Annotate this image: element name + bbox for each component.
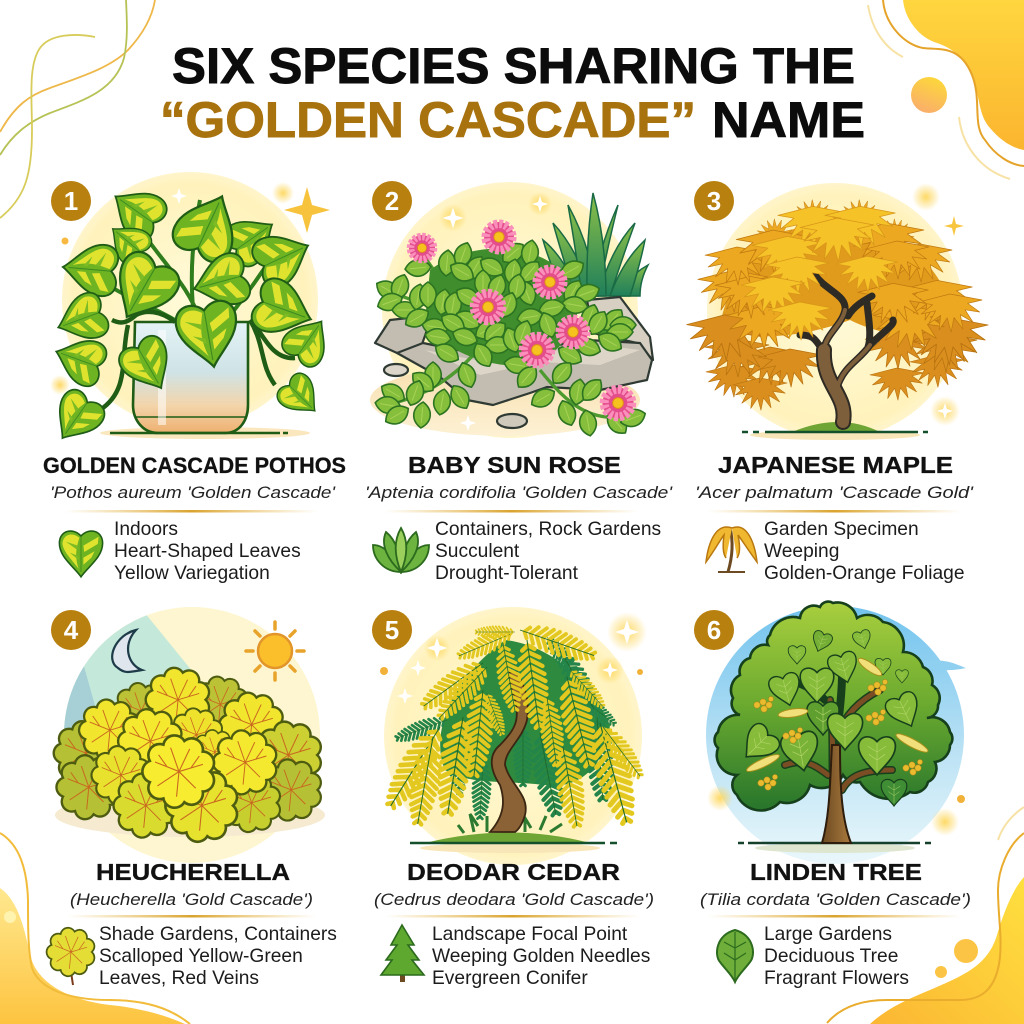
name: JAPANESE MAPLE <box>718 452 953 478</box>
feature list: Shade Gardens, Containers <box>99 924 337 945</box>
scientific name: 'Acer palmatum 'Cascade Gold' <box>695 484 974 502</box>
corner decoration: top left <box>0 0 155 218</box>
name: BABY SUN ROSE <box>408 452 621 478</box>
heuchera leaves <box>54 668 321 842</box>
title: SIX SPECIES SHARING THE <box>172 37 855 94</box>
title <box>160 37 865 148</box>
feature list: Weeping <box>764 541 839 562</box>
pothos leaves <box>44 177 339 451</box>
icon: weeping tree <box>706 527 757 572</box>
illustration: succulent on rocks <box>370 182 653 438</box>
stems <box>378 240 625 417</box>
icon: moon <box>112 630 142 672</box>
icon: succulent <box>373 528 429 572</box>
illustration: pothos in a glass pot <box>44 172 339 451</box>
illustration: weeping deodar cedar <box>379 607 647 865</box>
icon: scalloped leaf <box>47 928 94 985</box>
scientific name: (Heucherella 'Gold Cascade') <box>70 891 313 909</box>
illustration: heucherella mound with sun and moon <box>54 600 325 863</box>
number badge 2 <box>372 181 412 221</box>
name: HEUCHERELLA <box>96 859 290 885</box>
feature list: Deciduous Tree <box>764 946 898 967</box>
title: “GOLDEN CASCADE” <box>160 91 696 148</box>
scientific name: (Tilia cordata 'Golden Cascade') <box>700 891 971 909</box>
name: GOLDEN CASCADE POTHOS <box>43 453 346 478</box>
trunk and branches <box>785 675 892 800</box>
canopy <box>715 602 952 810</box>
number badge 2: 2 <box>385 186 399 216</box>
feature list: Scalloped Yellow-Green <box>99 946 303 967</box>
illustration: linden tree <box>706 602 966 864</box>
scientific name: 'Pothos aureum 'Golden Cascade' <box>50 484 336 502</box>
corner decoration: bottom right <box>827 807 1024 1024</box>
trunk <box>490 672 528 832</box>
dark outer tufts <box>687 315 988 410</box>
panel: linden tree <box>694 602 971 989</box>
feature list: Heart-Shaped Leaves <box>114 541 301 562</box>
icon: evergreen tree <box>381 925 424 982</box>
feature list: Succulent <box>435 541 520 562</box>
feature list: Landscape Focal Point <box>432 924 628 945</box>
rocks <box>375 297 653 428</box>
corner decoration: top right <box>868 0 1024 179</box>
feature list: Golden-Orange Foliage <box>764 563 965 584</box>
illustration: weeping maple tree <box>687 183 988 440</box>
panel: golden cascade pothos <box>43 172 346 584</box>
number badge 3: 3 <box>707 186 721 216</box>
name: DEODAR CEDAR <box>407 859 620 885</box>
scientific name: (Cedrus deodara 'Gold Cascade') <box>374 891 654 909</box>
feature list: Yellow Variegation <box>114 563 270 584</box>
green fronds <box>394 633 619 819</box>
feature list: Leaves, Red Veins <box>99 968 259 989</box>
feature list <box>114 519 301 584</box>
number badge 4: 4 <box>64 615 79 645</box>
feature list: Garden Specimen <box>764 519 919 540</box>
number badge 5 <box>372 610 412 650</box>
icon: heart leaf <box>59 531 103 577</box>
panel: baby sun rose <box>365 181 673 584</box>
bright yellow tufts <box>741 206 897 340</box>
pink flowers <box>409 222 634 419</box>
feature list: Large Gardens <box>764 924 892 945</box>
trunk and branches <box>800 275 893 422</box>
feature list: Indoors <box>114 519 178 540</box>
corner decoration: bottom left <box>0 833 190 1024</box>
yellow fronds <box>379 619 647 828</box>
feature list <box>99 924 337 989</box>
feature list <box>432 924 650 989</box>
panel: heucherella <box>47 600 337 989</box>
number badge 1 <box>51 181 91 221</box>
feature list: Fragrant Flowers <box>764 968 909 989</box>
name: LINDEN TREE <box>750 859 922 885</box>
number badge 4 <box>51 610 91 650</box>
feature list: Evergreen Conifer <box>432 968 588 989</box>
mid orange tufts <box>698 200 982 350</box>
number badge 5: 5 <box>385 615 399 645</box>
feature list: Containers, Rock Gardens <box>435 519 661 540</box>
scientific name: 'Aptenia cordifolia 'Golden Cascade' <box>365 484 673 502</box>
number badge 3 <box>694 181 734 221</box>
icon: sun <box>246 622 304 680</box>
grass blades <box>543 193 648 296</box>
panel: deodar cedar <box>372 607 654 989</box>
number badge 6 <box>694 610 734 650</box>
succulent leaves <box>373 238 648 438</box>
icon: linden leaf <box>717 930 753 982</box>
title: NAME <box>712 91 865 148</box>
heart leaves and blossoms <box>734 629 930 806</box>
panel: japanese maple <box>687 181 988 584</box>
number badge 6: 6 <box>707 615 721 645</box>
number badge 1: 1 <box>64 186 78 216</box>
feature list <box>435 519 661 584</box>
canopy mass <box>720 215 958 336</box>
feature list: Drought-Tolerant <box>435 563 579 584</box>
feature list: Weeping Golden Needles <box>432 946 650 967</box>
feature list <box>764 924 909 989</box>
feature list <box>764 519 965 584</box>
green back mass <box>440 640 610 786</box>
